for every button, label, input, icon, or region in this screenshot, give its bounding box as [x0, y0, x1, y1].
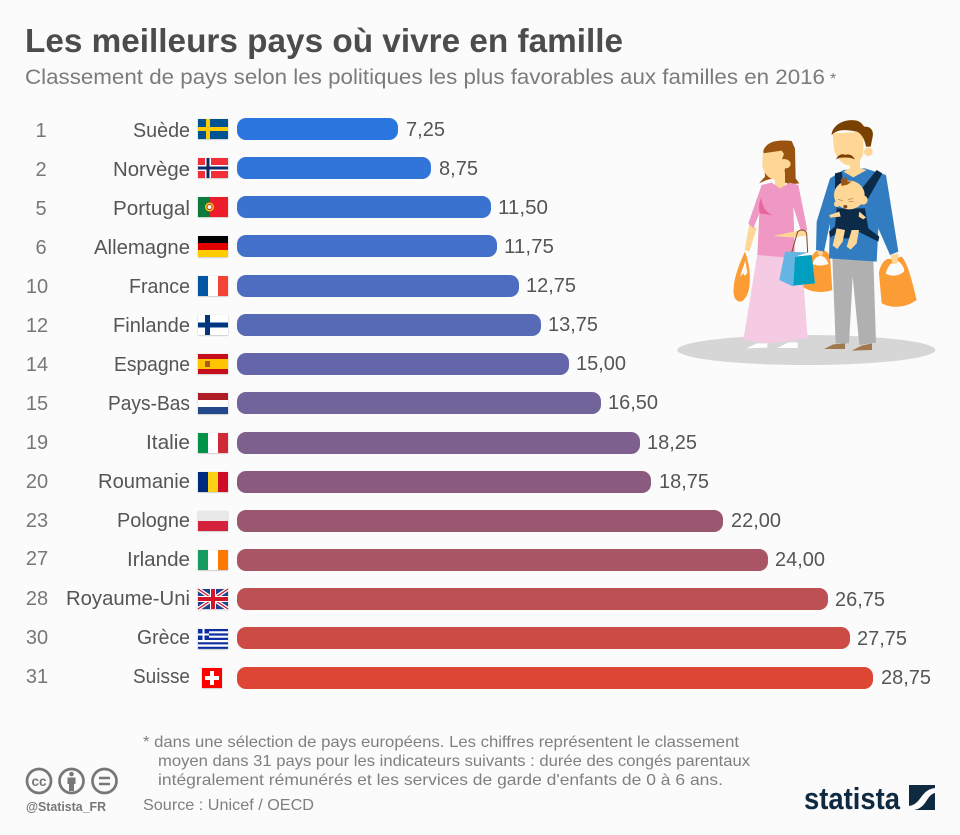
value: 8,75 [439, 158, 478, 180]
row: Pays-Bas [26, 392, 658, 415]
row: France: France [129, 275, 190, 298]
value: 7,25 [406, 119, 445, 141]
flag: Allemagne [198, 236, 228, 257]
illustration: family with shopping bags [677, 120, 935, 365]
bar: 15,00 [237, 353, 569, 375]
row: Suède: Suède [133, 119, 190, 142]
value: 12,75 [526, 275, 576, 297]
licence icons [27, 769, 116, 793]
row: Roumanie: Roumanie [98, 470, 190, 493]
row: Pays-Bas: Pays-Bas [108, 392, 190, 415]
bag: blue [779, 230, 815, 287]
logo mark [909, 785, 935, 810]
man [816, 120, 917, 351]
flag: Pays-Bas [198, 393, 228, 414]
value: 24,00 [775, 549, 825, 571]
value: 22,00 [731, 510, 781, 532]
row: Grèce: Grèce [137, 626, 190, 649]
bar: 11,50 [237, 196, 491, 218]
row: Pologne: 23 [26, 510, 48, 532]
flag: Italie [198, 433, 228, 453]
bar: 18,25 [237, 432, 640, 454]
value: 15,00 [576, 353, 626, 375]
subtitle asterisk: * [830, 71, 836, 88]
bar: 11,75 [237, 235, 497, 257]
row: Royaume-Uni: Royaume-Uni [66, 587, 190, 610]
flag: Roumanie [198, 472, 228, 492]
row: Portugal [35, 196, 548, 220]
row: Italie: Italie [146, 431, 190, 454]
icon: cc: cc [31, 774, 47, 789]
row: France: 10 [26, 276, 48, 298]
value: 27,75 [857, 628, 907, 650]
flag: Grèce [198, 629, 228, 649]
title: Les meilleurs pays où vivre en famille [25, 22, 623, 59]
flag: Irlande [198, 550, 228, 570]
ranked bar chart [26, 118, 931, 689]
row: Royaume-Uni [26, 587, 885, 611]
baby carrier and baby [829, 170, 882, 250]
row: Grèce: 30 [26, 627, 48, 649]
row: Irlande: Irlande [127, 548, 190, 571]
row: Finlande [26, 314, 598, 337]
value: 11,75 [504, 236, 554, 258]
row: Pologne: Pologne [117, 509, 190, 532]
flag: Royaume-Uni [198, 589, 228, 609]
bag: orange behind [803, 250, 832, 292]
row: Finlande: 12 [26, 315, 48, 337]
row: Pays-Bas: 15 [26, 393, 48, 415]
bar: 16,50 [237, 392, 601, 414]
footnote: intégralement rémunérés et les services de garde d'enfants de 0 à 6 ans. [158, 772, 723, 789]
row: Italie [26, 431, 697, 454]
row: Suisse: 31 [26, 666, 48, 688]
row: France [26, 275, 576, 298]
icon: no derivatives [92, 769, 116, 793]
row: Espagne: Espagne [114, 353, 190, 376]
value: 16,50 [608, 392, 658, 414]
flag: Pologne [198, 511, 228, 531]
bar: 12,75 [237, 275, 519, 297]
footnote: * dans une sélection de pays européens. Les chiffres représentent le classement [143, 734, 740, 751]
value: 11,50 [498, 197, 548, 219]
value: 26,75 [835, 589, 885, 611]
value: 18,75 [659, 471, 709, 493]
row: Grèce [26, 626, 907, 650]
row: Suisse [26, 665, 931, 689]
row: Allemagne: Allemagne [94, 236, 190, 259]
row: Portugal: Portugal [113, 197, 190, 220]
row: Portugal: 5 [35, 198, 47, 220]
twitter handle: @Statista_FR [26, 799, 107, 814]
footnote [143, 734, 750, 789]
flag: Espagne [198, 354, 228, 374]
value: 18,25 [647, 432, 697, 454]
row: Espagne [26, 353, 626, 376]
bar: 27,75 [237, 627, 850, 649]
woman [733, 141, 808, 348]
row: Norvège [35, 157, 478, 181]
icon: attribution [60, 769, 84, 793]
bar: 26,75 [237, 588, 828, 610]
flag: Suisse [202, 668, 222, 688]
row: Roumanie: 20 [26, 471, 48, 493]
source: Source : Unicef / OECD [143, 797, 314, 814]
value: 13,75 [548, 314, 598, 336]
bar: 22,00 [237, 510, 723, 532]
row: Suède [35, 118, 445, 142]
row: Norvège: 2 [35, 159, 47, 181]
row: Irlande [26, 548, 825, 571]
row: Allemagne [35, 235, 554, 259]
row: Roumanie [26, 470, 709, 493]
ground shadow [677, 335, 935, 365]
flag: Suède [198, 119, 228, 139]
row: Finlande: Finlande [113, 314, 190, 337]
bar: 13,75 [237, 314, 541, 336]
row: Royaume-Uni: 28 [26, 588, 48, 610]
statista logo: statista [804, 781, 901, 816]
subtitle: Classement de pays selon les politiques les plus favorables aux familles en 2016 [25, 66, 825, 89]
value: 28,75 [881, 667, 931, 689]
footnote: moyen dans 31 pays pour les indicateurs suivants : durée des congés parentaux [158, 753, 750, 770]
flag: Norvège [198, 158, 228, 178]
row: Italie: 19 [26, 432, 48, 454]
row: Suède: 1 [35, 120, 47, 142]
bar: 18,75 [237, 471, 651, 493]
row: Suisse: Suisse [133, 665, 190, 688]
bar: 7,25 [237, 118, 398, 140]
row: Norvège: Norvège [113, 158, 190, 181]
bar: 8,75 [237, 157, 431, 179]
flag: Portugal [198, 197, 228, 217]
row: Espagne: 14 [26, 354, 48, 376]
bar: 28,75 [237, 667, 873, 689]
flag: Finlande [198, 315, 228, 335]
row: Allemagne: 6 [35, 237, 47, 259]
flag: France [198, 276, 228, 296]
bar: 24,00 [237, 549, 768, 571]
row: Pologne [26, 509, 781, 532]
row: Irlande: 27 [26, 548, 48, 570]
